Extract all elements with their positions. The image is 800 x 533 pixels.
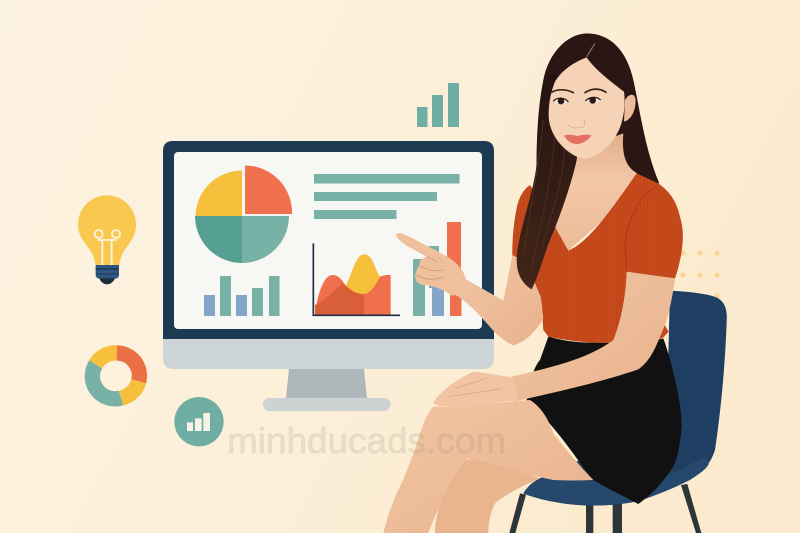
neck and chest [547, 133, 637, 251]
resting arm [512, 272, 675, 402]
crossed top leg [383, 400, 593, 533]
monitor screen [174, 152, 482, 329]
pointing hand [396, 233, 466, 296]
face [549, 57, 625, 159]
eyebrows [552, 89, 606, 93]
icon: floating bar chart [417, 83, 459, 127]
icon: donut chart [92, 353, 139, 399]
text placeholder lines [314, 174, 460, 219]
crossed legs [383, 400, 593, 533]
icon: bar chart badge [174, 397, 224, 446]
finger creases [417, 257, 443, 279]
right bar chart [413, 222, 462, 316]
monitor stand [286, 369, 367, 398]
monitor chin [163, 335, 494, 369]
monitor [163, 141, 494, 411]
chair [509, 291, 727, 533]
eyes [553, 97, 601, 104]
area chart [313, 243, 400, 315]
decorative dot grid [680, 250, 720, 299]
small bar chart [204, 276, 280, 316]
icon: light bulb [78, 195, 136, 284]
resting hand [433, 372, 518, 406]
monitor bezel [163, 141, 494, 339]
monitor base [263, 398, 390, 411]
pointing arm [454, 255, 543, 345]
skirt [527, 337, 682, 504]
pie chart [195, 166, 292, 263]
long hair strand over shirt [517, 73, 577, 289]
hand creases [448, 378, 502, 397]
nose shadow [567, 120, 585, 128]
lower leg [435, 458, 540, 533]
sleeve seam [625, 187, 657, 272]
torso shirt [512, 173, 683, 343]
lips [564, 135, 592, 144]
hair back [536, 33, 659, 193]
watermark: minhducads.com [227, 420, 506, 461]
hair part [587, 43, 595, 57]
ear [624, 95, 636, 122]
presenter on chair [383, 33, 727, 533]
